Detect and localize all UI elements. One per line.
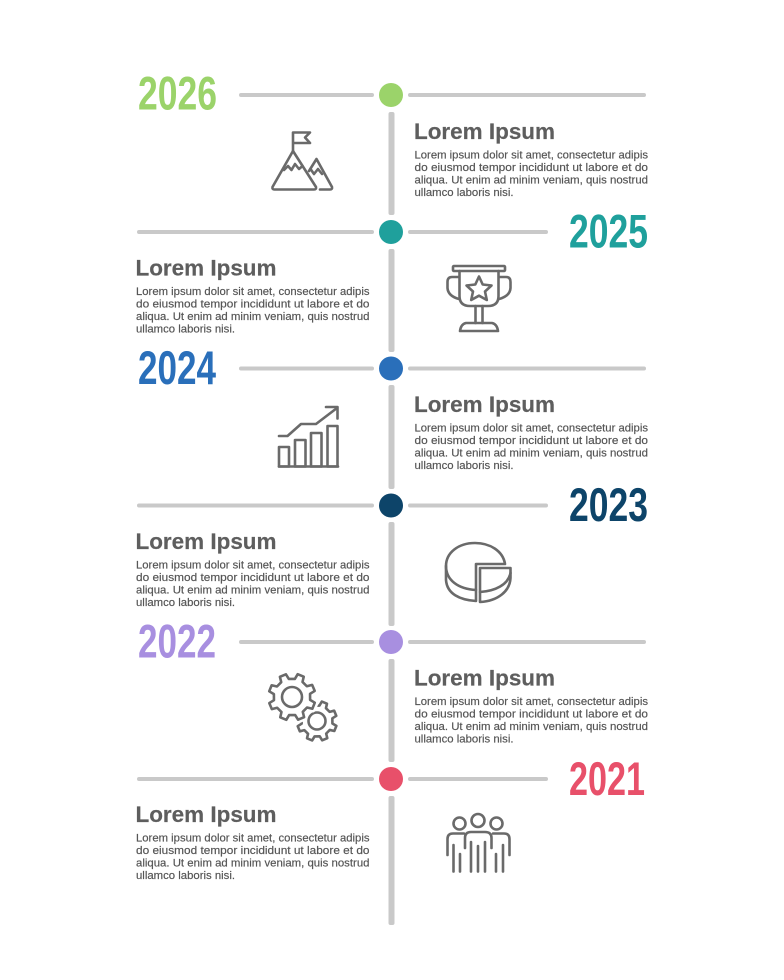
vertical timeline spine — [388, 112, 394, 925]
year 2024: 2024 — [138, 341, 216, 394]
connector lines 2022 — [239, 640, 646, 644]
panel: 2023 — [136, 478, 648, 609]
icon: gears — [262, 667, 343, 747]
text block 2024 — [414, 392, 649, 472]
text block 2026: aliqua. Ut enim ad minim veniam, quis nostrud — [414, 174, 648, 186]
icon: team of people — [448, 814, 510, 872]
text block 2026: Lorem Ipsum — [414, 119, 555, 144]
panel: 2024 — [138, 341, 649, 472]
text block 2025 — [136, 256, 370, 336]
panel: 2026 — [138, 66, 649, 199]
text block 2024: Lorem ipsum dolor sit amet, consectetur adipis — [414, 422, 649, 434]
connector lines 2026 — [239, 93, 646, 97]
year 2023: 2023 — [569, 478, 648, 531]
connector lines 2021 — [137, 777, 548, 781]
marker 2024 — [379, 356, 403, 380]
connector lines 2023 — [137, 504, 548, 508]
text block 2021 — [136, 802, 370, 882]
text block 2023: aliqua. Ut enim ad minim veniam, quis nostrud — [136, 584, 370, 596]
text block 2023: ullamco laboris nisi. — [136, 597, 235, 609]
panel: 2022 — [138, 614, 649, 747]
icon: trophy — [448, 266, 510, 331]
text block 2025: do eiusmod tempor incididunt ut labore et do — [136, 298, 370, 310]
text block 2023: Lorem Ipsum — [136, 529, 276, 554]
text block 2024: aliqua. Ut enim ad minim veniam, quis nostrud — [414, 448, 648, 460]
marker 2022 — [379, 630, 403, 654]
year 2022: 2022 — [138, 614, 216, 668]
marker 2026 — [379, 83, 403, 107]
text block 2025: aliqua. Ut enim ad minim veniam, quis nostrud — [136, 311, 370, 323]
marker 2021 — [379, 767, 403, 791]
marker 2025 — [379, 220, 403, 244]
text block 2025: ullamco laboris nisi. — [136, 324, 235, 336]
text block 2026: do eiusmod tempor incididunt ut labore et do — [414, 162, 648, 174]
text block 2024: Lorem Ipsum — [414, 392, 555, 417]
text block 2021: Lorem ipsum dolor sit amet, consectetur adipis — [136, 832, 370, 844]
text block 2025: Lorem ipsum dolor sit amet, consectetur adipis — [136, 286, 370, 298]
year 2021: 2021 — [569, 752, 645, 805]
icon: growth bar chart — [279, 407, 338, 466]
text block 2024: ullamco laboris nisi. — [414, 460, 514, 472]
text block 2021: do eiusmod tempor incididunt ut labore et do — [136, 845, 370, 857]
text block 2022: Lorem Ipsum — [414, 666, 555, 690]
marker 2023 — [379, 494, 403, 518]
icon: mountain with flag — [272, 132, 332, 190]
text block 2023: do eiusmod tempor incididunt ut labore et do — [136, 572, 370, 584]
panel: 2021 — [136, 752, 645, 882]
text block 2022 — [414, 666, 649, 746]
year 2025: 2025 — [569, 204, 648, 258]
text block 2021: ullamco laboris nisi. — [136, 870, 235, 882]
text block 2024: do eiusmod tempor incididunt ut labore et do — [414, 435, 648, 447]
icon: pie chart — [446, 543, 510, 602]
text block 2022: aliqua. Ut enim ad minim veniam, quis nostrud — [414, 721, 648, 733]
text block 2023 — [136, 529, 370, 609]
text block 2021: Lorem Ipsum — [136, 802, 276, 827]
text block 2022: do eiusmod tempor incididunt ut labore et do — [414, 708, 648, 720]
text block 2026 — [414, 119, 649, 199]
text block 2026: Lorem ipsum dolor sit amet, consectetur adipis — [414, 150, 649, 162]
text block 2025: Lorem Ipsum — [136, 256, 276, 280]
text block 2022: ullamco laboris nisi. — [414, 734, 514, 746]
panel: 2025 — [136, 204, 648, 336]
connector lines 2025 — [137, 230, 548, 234]
text block 2023: Lorem ipsum dolor sit amet, consectetur adipis — [136, 560, 370, 572]
text block 2022: Lorem ipsum dolor sit amet, consectetur adipis — [414, 696, 649, 708]
year 2026: 2026 — [138, 66, 217, 120]
text block 2026: ullamco laboris nisi. — [414, 187, 514, 199]
text block 2021: aliqua. Ut enim ad minim veniam, quis nostrud — [136, 858, 370, 870]
connector lines 2024 — [239, 366, 646, 370]
